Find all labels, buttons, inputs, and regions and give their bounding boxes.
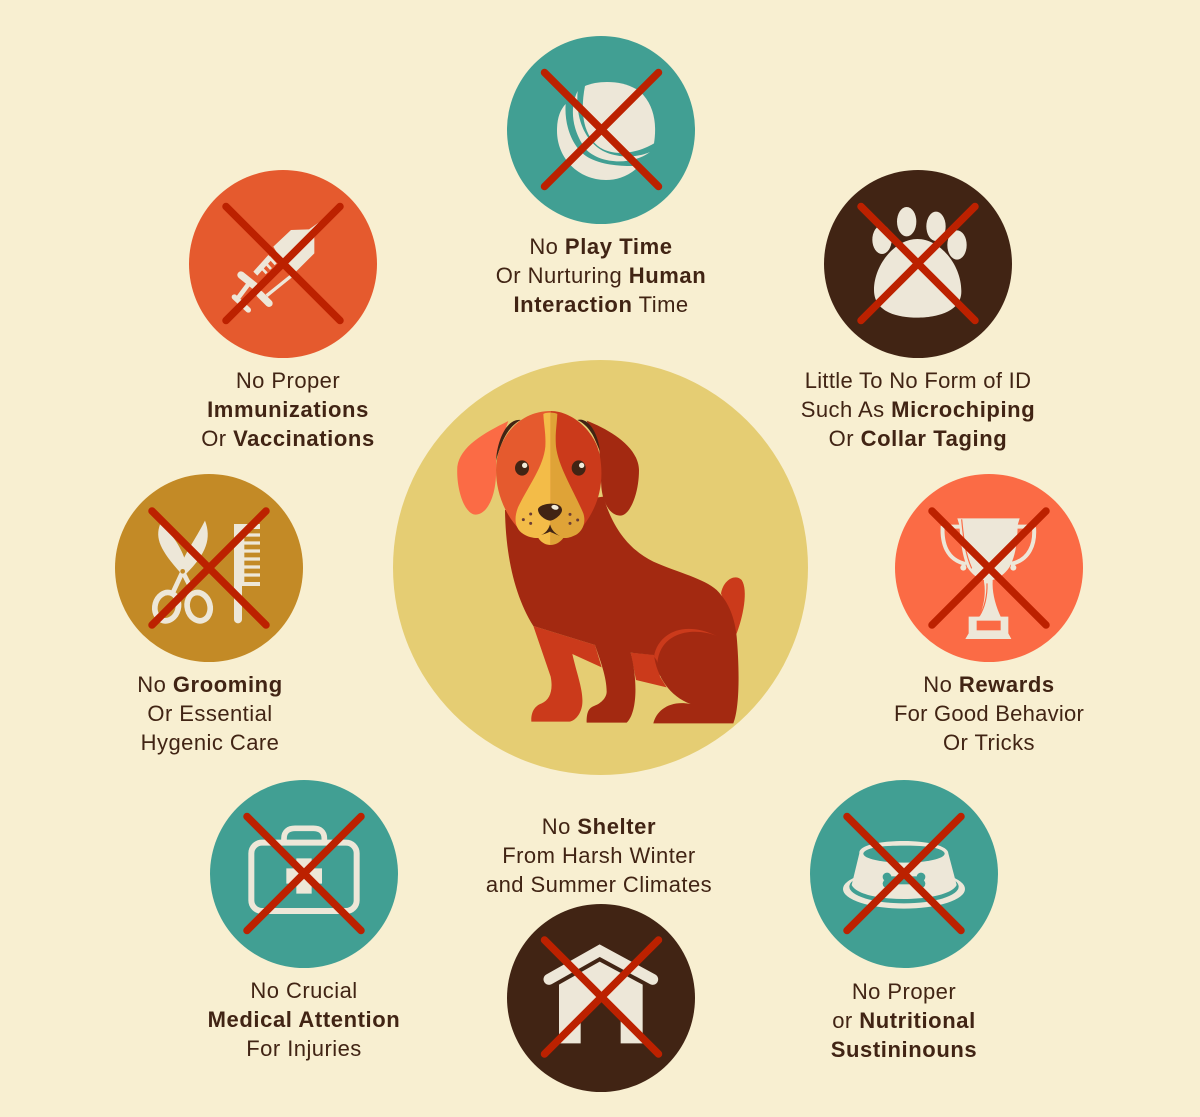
text: nutrition: or Nutritional: [832, 1008, 976, 1033]
text: immunizations: Immunizations: [207, 397, 369, 422]
icon: dog house: [549, 951, 653, 1043]
text: microchip id: Such As Microchiping: [801, 397, 1035, 422]
text: immunizations: Or Vaccinations: [201, 426, 375, 451]
text: shelter: No Shelter: [542, 814, 656, 839]
text: grooming: Or Essential: [147, 701, 273, 726]
panel: nutrition: [810, 780, 998, 968]
panel: grooming: [115, 474, 303, 662]
icon: dog: [457, 411, 745, 723]
text: medical: No Crucial: [250, 978, 358, 1003]
icon: red cross: [226, 206, 340, 320]
panel: play time: [507, 36, 695, 224]
text: microchip id: Little To No Form of ID: [805, 368, 1031, 393]
panel: immunizations: [189, 170, 377, 358]
icon: red cross: [932, 511, 1046, 625]
text: rewards: Or Tricks: [943, 730, 1035, 755]
icon: red cross: [247, 816, 361, 930]
icon: medical bag: [251, 828, 357, 911]
text: microchip id: Or Collar Taging: [829, 426, 1007, 451]
text: shelter: and Summer Climates: [486, 872, 712, 897]
panel: shelter: [507, 904, 695, 1092]
panel: rewards: [895, 474, 1083, 662]
text: immunizations: No Proper: [236, 368, 340, 393]
panel: medical: [210, 780, 398, 968]
panel: microchip id: [824, 170, 1012, 358]
icon: syringe: [234, 213, 332, 310]
icon: scissors and comb: [152, 521, 260, 624]
icon: red cross: [847, 816, 961, 930]
icon: trophy: [942, 518, 1035, 639]
text: play time: No Play Time: [529, 234, 673, 259]
text: grooming: Hygenic Care: [141, 730, 279, 755]
text: medical: For Injuries: [246, 1036, 362, 1061]
icon: red cross: [544, 72, 658, 186]
text: nutrition: Sustininouns: [831, 1037, 977, 1062]
icon: paw: [872, 207, 967, 318]
text: rewards: For Good Behavior: [894, 701, 1084, 726]
text: play time: Interaction Time: [513, 292, 689, 317]
center circle with dog: [393, 360, 808, 775]
text: shelter: From Harsh Winter: [502, 843, 696, 868]
icon: food bowl: [843, 841, 965, 909]
icon: red cross: [861, 206, 975, 320]
text: nutrition: No Proper: [852, 979, 956, 1004]
text: medical: Medical Attention: [208, 1007, 400, 1032]
icon: red cross: [152, 511, 266, 625]
text: grooming: No Grooming: [137, 672, 283, 697]
icon: red cross: [544, 940, 658, 1054]
icon: ball: [557, 82, 655, 180]
text: play time: Or Nurturing Human: [496, 263, 706, 288]
text: rewards: No Rewards: [923, 672, 1055, 697]
